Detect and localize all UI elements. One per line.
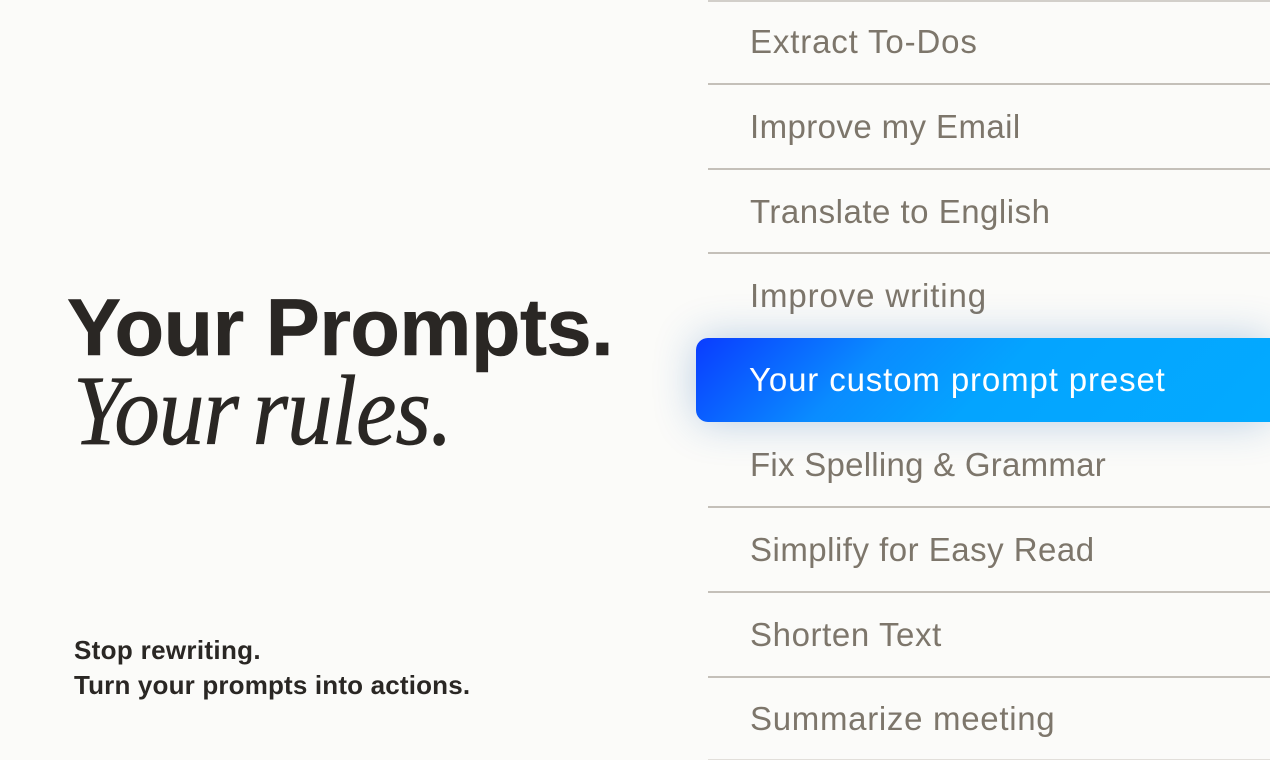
list item: Summarize meeting: Summarize meeting	[750, 700, 1055, 737]
heading: Your rules.: Your rules.	[73, 355, 452, 466]
highlighted label: Your custom prompt preset	[749, 361, 1166, 398]
tagline	[74, 635, 470, 700]
list item: Fix Spelling & Grammar: Fix Spelling & Grammar	[750, 446, 1106, 483]
list item: Improve writing: Improve writing	[750, 277, 987, 314]
tagline: Stop rewriting.	[74, 635, 261, 665]
title	[67, 283, 613, 466]
list item: Simplify for Easy Read: Simplify for Easy Read	[750, 531, 1095, 568]
list item: Improve my Email: Improve my Email	[750, 108, 1021, 145]
tagline: Turn your prompts into actions.	[74, 670, 470, 700]
list item: Shorten Text: Shorten Text	[750, 616, 942, 653]
panel: prompt list	[708, 0, 1270, 760]
list item: Extract To-Dos: Extract To-Dos	[750, 23, 978, 60]
list item: Translate to English: Translate to English	[750, 193, 1050, 230]
heading: Your Prompts.: Your Prompts.	[67, 283, 613, 373]
highlighted list item: Your custom prompt preset	[696, 338, 1270, 422]
